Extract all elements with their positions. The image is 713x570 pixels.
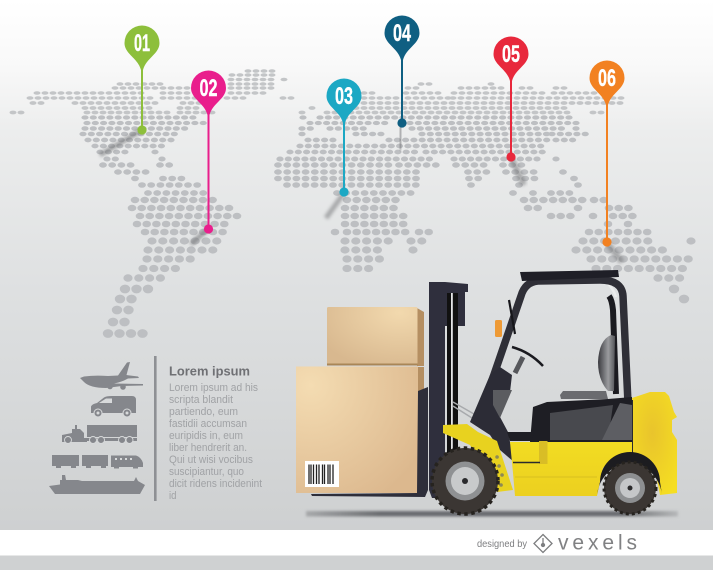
body text: id bbox=[169, 490, 176, 502]
vexels credit: vexels bbox=[558, 532, 637, 554]
body text: liber hendrerit an. bbox=[169, 442, 247, 454]
cardboard boxes bbox=[296, 307, 424, 493]
footer lower band bbox=[0, 556, 713, 570]
icon: van bbox=[91, 396, 136, 417]
top box bbox=[327, 307, 424, 366]
transport icons bbox=[49, 362, 145, 494]
chassis bbox=[443, 400, 633, 496]
pin 06 bbox=[590, 60, 624, 262]
fork and carriage bbox=[311, 387, 428, 497]
bottom box bbox=[296, 366, 424, 493]
pin 03 bbox=[326, 78, 362, 218]
vexels credit bbox=[477, 532, 637, 554]
icon: train bbox=[52, 455, 143, 468]
text block bbox=[169, 364, 262, 502]
pin 01: 01 bbox=[134, 30, 150, 57]
body and dashboard bbox=[470, 367, 632, 462]
body text: partiendo, eum bbox=[169, 406, 238, 418]
body text: fastidii accumsan bbox=[169, 418, 247, 430]
body text: suscipiantur, quo bbox=[169, 466, 244, 478]
icon: airplane bbox=[80, 362, 143, 390]
heading: Lorem ipsum bbox=[169, 364, 250, 378]
icon: vexels diamond bbox=[534, 534, 552, 552]
forklift bbox=[311, 270, 677, 514]
cab frame bbox=[488, 270, 628, 403]
pin 06: 06 bbox=[598, 65, 616, 92]
footer strip bbox=[0, 530, 713, 556]
steering wheel bbox=[512, 347, 543, 373]
pin 05: 05 bbox=[502, 41, 520, 68]
vexels credit: designed by bbox=[477, 538, 528, 550]
ground shadow bbox=[306, 511, 678, 516]
barcode bbox=[305, 461, 339, 487]
body text: euripidis in, eum bbox=[169, 430, 243, 442]
body text: Qui ut wisi vocibus bbox=[169, 454, 253, 466]
seat bbox=[560, 335, 615, 399]
pin 04: 04 bbox=[393, 20, 411, 47]
mirror and warning light bbox=[495, 300, 515, 337]
pin 03: 03 bbox=[335, 83, 353, 110]
body text: Lorem ipsum ad his bbox=[169, 382, 258, 394]
counterweight bbox=[632, 392, 677, 495]
pin 04 bbox=[384, 16, 420, 150]
pin 01 bbox=[100, 26, 160, 155]
body text: scripta blandit bbox=[169, 394, 233, 406]
pin 05 bbox=[494, 36, 528, 185]
icon: truck bbox=[62, 425, 137, 444]
pin 02 bbox=[191, 70, 226, 244]
icon: cargo ship bbox=[49, 474, 145, 494]
rear wheel bbox=[597, 452, 662, 514]
divider bbox=[154, 356, 157, 501]
pin 02: 02 bbox=[200, 75, 218, 102]
front wheel bbox=[432, 448, 498, 514]
body text: dicit ridens incidenint bbox=[169, 478, 262, 490]
mast bbox=[429, 282, 474, 498]
body text bbox=[169, 382, 262, 502]
world map of dots bbox=[13, 71, 698, 334]
roof bbox=[520, 270, 619, 281]
